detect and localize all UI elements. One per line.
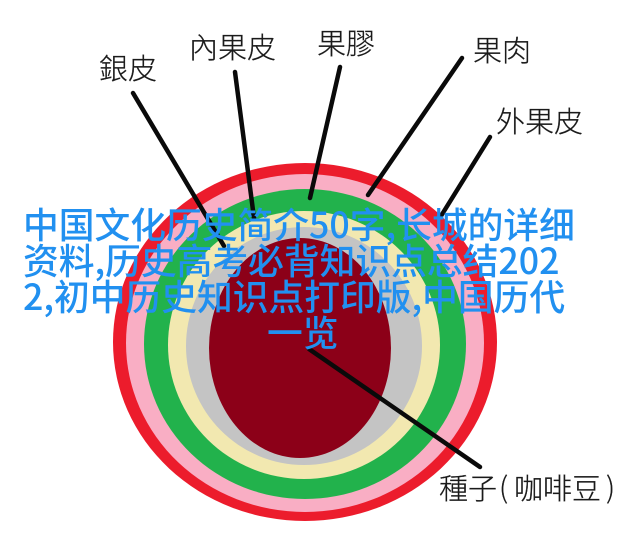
label: silver skin: 銀皮 — [99, 46, 157, 88]
label: parchment: 內果皮 — [189, 25, 276, 67]
leader line: silver skin — [133, 93, 224, 246]
core: seed (dark red) — [209, 238, 391, 458]
label: outer skin: 外果皮 — [496, 99, 583, 141]
ring: pulp (pink) — [126, 174, 484, 512]
ring: parchment (cream) — [168, 211, 440, 479]
label: seed: ( — [499, 465, 508, 507]
leader line: pulp — [368, 58, 462, 195]
label: seed: 咖啡豆 — [514, 466, 601, 508]
ring: outer skin (red) — [113, 163, 497, 521]
leader line: parchment — [235, 72, 254, 218]
label: seed: ) — [606, 465, 615, 507]
leader line: outer skin — [441, 137, 490, 216]
title overlay — [23, 198, 575, 357]
label: seed: 種子 — [439, 466, 497, 508]
title overlay: 中国文化历史简介50字,长城的详细 — [23, 198, 575, 249]
leader line: pectin — [310, 67, 340, 198]
label: seed — [439, 465, 615, 508]
fruit cross-section rings — [113, 163, 497, 521]
label: pulp: 果肉 — [473, 28, 531, 70]
title overlay: 一览 — [267, 306, 338, 357]
title overlay: 资料,历史高考必背知识点总结202 — [23, 234, 560, 285]
leader line: seed — [309, 349, 480, 467]
label: pectin: 果膠 — [317, 21, 375, 63]
leader lines — [133, 58, 490, 467]
title overlay: 2,初中历史知识点打印版,中国历代 — [23, 270, 565, 321]
ring: silver skin (grey) — [186, 227, 422, 465]
ring: pectin (green) — [144, 189, 466, 499]
